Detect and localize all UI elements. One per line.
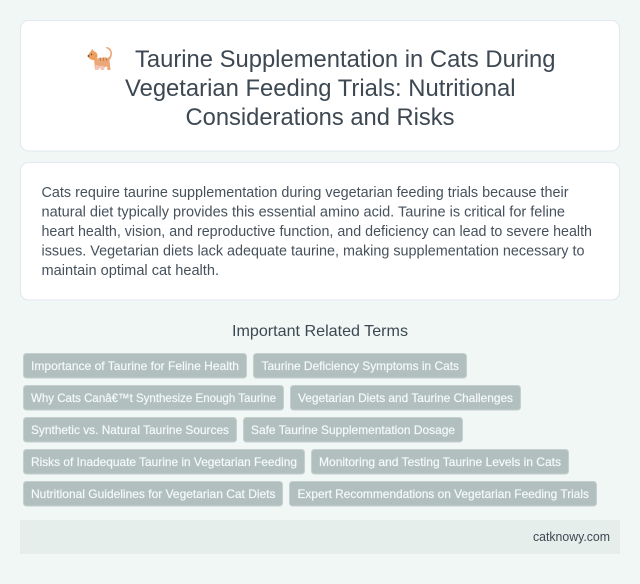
tag [312, 450, 568, 474]
summary text: issues. Vegetarian diets lack adequate taurine, making supplementation necessary to [42, 244, 584, 260]
summary text: natural diet typically provides this essential amino acid. Taurine is critical for feline [42, 204, 565, 220]
title [125, 46, 556, 131]
icon: cat [88, 47, 112, 70]
tag: Why Cats Canâ€™t Synthesize Enough Taurine [31, 391, 276, 405]
footer [20, 520, 620, 554]
tag [290, 482, 596, 506]
title: Taurine Supplementation in Cats During [135, 46, 556, 73]
title: Considerations and Risks [186, 104, 454, 131]
tag: Risks of Inadequate Taurine in Vegetarian Feeding [31, 455, 297, 469]
summary text: Cats require taurine supplementation during vegetarian feeding trials because their [42, 185, 569, 201]
title: Vegetarian Feeding Trials: Nutritional [125, 75, 516, 102]
tag [24, 354, 246, 378]
tag [290, 386, 520, 410]
tag: Synthetic vs. Natural Taurine Sources [31, 423, 229, 437]
tag: Taurine Deficiency Symptoms in Cats [262, 359, 459, 373]
summary text [42, 185, 592, 279]
tag [24, 450, 304, 474]
tag: Monitoring and Testing Taurine Levels in Cats [319, 455, 561, 469]
heading: related terms: Important Related Terms [232, 323, 408, 340]
tag [24, 482, 282, 506]
summary text: maintain optimal cat health. [42, 263, 219, 279]
tag: Expert Recommendations on Vegetarian Feeding Trials [298, 487, 589, 501]
tag: Vegetarian Diets and Taurine Challenges [298, 391, 513, 405]
tag [244, 418, 462, 442]
panel: title card [20, 20, 620, 151]
tag [254, 354, 466, 378]
tag: Importance of Taurine for Feline Health [31, 359, 239, 373]
tag [24, 386, 284, 410]
tag [24, 418, 236, 442]
tag: Safe Taurine Supplementation Dosage [251, 423, 455, 437]
footer source: catknowy.com [533, 530, 610, 544]
panel: summary card [20, 162, 620, 300]
summary text: heart health, vision, and reproductive function, and deficiency can lead to severe health [42, 224, 592, 240]
related terms tags [24, 354, 596, 506]
tag: Nutritional Guidelines for Vegetarian Cat Diets [31, 487, 276, 501]
